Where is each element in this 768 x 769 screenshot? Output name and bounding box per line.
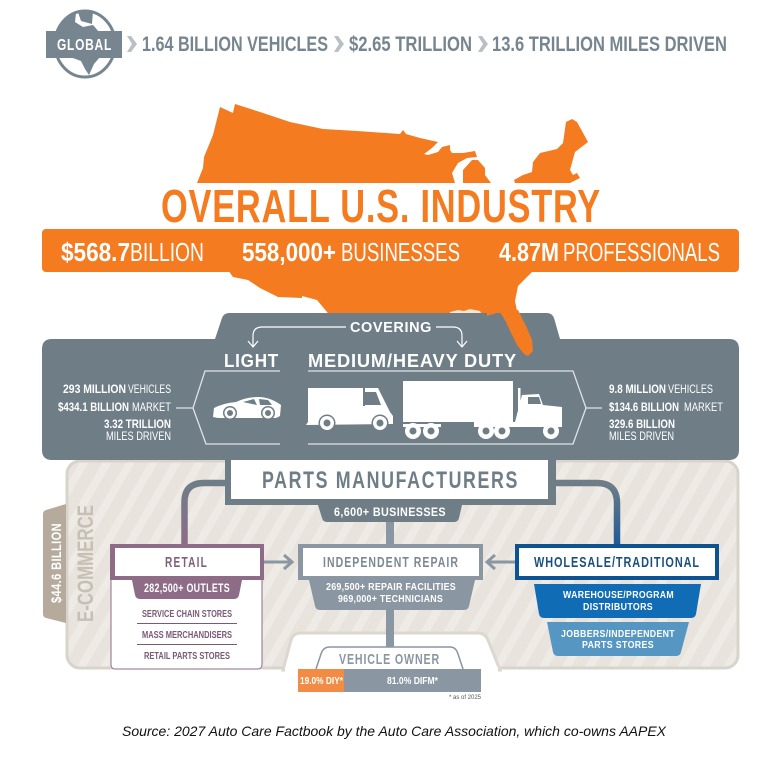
tab: e-commerce sales — [43, 504, 66, 623]
panel: retail: RETAIL — [165, 554, 208, 571]
heavy vehicle stats — [609, 382, 724, 443]
trillion stat: $2.65 TRILLION — [349, 33, 472, 56]
warehouse distributors tab — [534, 584, 701, 618]
light vehicle stats: MARKET — [132, 400, 172, 414]
revenue stat: $568.7 — [61, 237, 130, 267]
light vehicle stats: $434.1 BILLION — [58, 400, 129, 414]
light vehicle stats: MILES DRIVEN — [106, 429, 171, 443]
arrow: covering to light — [248, 327, 346, 347]
source line: Source: 2027 Auto Care Factbook by the Auto Care Association, which co-owns AAPEX — [122, 723, 667, 739]
businesses stat — [242, 237, 460, 267]
map: Florida — [487, 310, 533, 356]
connector: manufacturers to retail — [184, 483, 226, 546]
outlets tab — [132, 580, 242, 599]
warehouse distributors tab: DISTRIBUTORS — [583, 601, 653, 613]
icon: van — [306, 388, 393, 432]
panel: wholesale traditional — [515, 544, 719, 656]
frame: medium heavy vehicles — [308, 371, 602, 444]
businesses count tab: 6,600+ BUSINESSES — [334, 505, 446, 519]
retail channel list: RETAIL PARTS STORES — [144, 650, 230, 662]
heavy vehicle stats: $134.6 BILLION — [609, 400, 679, 414]
icon: globe: GLOBAL — [57, 37, 112, 54]
panel: independent repair: INDEPENDENT REPAIR — [323, 554, 459, 571]
panel: vehicle coverage — [42, 309, 739, 460]
professionals stat — [499, 237, 720, 267]
heavy vehicle stats: MARKET — [684, 400, 724, 414]
panel: retail — [110, 544, 264, 669]
connector: manufacturers to independent repair to vehicle owner — [386, 520, 394, 648]
map: northern United States — [197, 104, 588, 183]
icon: chevron — [478, 36, 488, 52]
light vehicle stats: VEHICLES — [128, 382, 171, 396]
icon: chevron — [334, 36, 344, 52]
retail channel list: SERVICE CHAIN STORES — [142, 608, 232, 620]
medium heavy heading: MEDIUM/HEAVY DUTY — [308, 351, 517, 371]
arrow: retail to independent repair — [264, 555, 292, 569]
parts manufacturers box: PARTS MANUFACTURERS — [262, 467, 519, 494]
vehicles stat: 1.64 BILLION VEHICLES — [142, 33, 328, 56]
repair facilities tab: 269,500+ REPAIR FACILITIES — [326, 581, 456, 593]
e-commerce label: E-COMMERCE — [73, 505, 98, 622]
map: Gulf Coast specks — [450, 309, 481, 313]
outlets tab: 282,500+ OUTLETS — [144, 581, 230, 595]
frame: light vehicles — [176, 371, 280, 444]
light vehicle stats: 3.32 TRILLION — [104, 417, 171, 431]
arrow: wholesale to independent repair — [487, 555, 515, 569]
bar: do it for me share: 81.0% DIFM* — [387, 676, 438, 687]
banner: U.S. industry totals — [42, 229, 739, 272]
heavy vehicle stats: VEHICLES — [668, 382, 713, 396]
panel: wholesale traditional: WHOLESALE/TRADITIONAL — [534, 554, 700, 571]
map: southern United States — [228, 270, 535, 316]
panel: independent repair — [298, 544, 483, 610]
icon: globe — [46, 11, 122, 77]
icon: car — [213, 397, 281, 420]
heavy vehicle stats: 329.6 BILLION — [609, 417, 675, 431]
jobbers tab: PARTS STORES — [582, 639, 654, 651]
retail channel list: MASS MERCHANDISERS — [142, 629, 232, 641]
light heading: LIGHT — [224, 351, 279, 371]
tab: e-commerce sales: $44.6 BILLION — [49, 523, 64, 603]
retail channel list — [137, 608, 237, 662]
warehouse distributors tab: WAREHOUSE/PROGRAM — [563, 589, 674, 601]
bar: do it yourself share — [298, 669, 344, 692]
icon: chevron — [127, 36, 137, 52]
businesses stat: 558,000+ — [242, 237, 336, 267]
panel: vehicle owner — [298, 647, 481, 701]
repair facilities tab — [309, 580, 475, 610]
panel: e-commerce striped background — [67, 461, 738, 673]
jobbers tab — [547, 622, 689, 656]
professionals stat: 4.87M — [499, 237, 559, 267]
footnote: * as of 2025 — [449, 694, 481, 701]
jobbers tab: JOBBERS/INDEPENDENT — [561, 628, 675, 640]
businesses stat: BUSINESSES — [341, 237, 460, 267]
global statistics row — [46, 11, 727, 77]
arrow: covering to medium/heavy — [436, 327, 467, 347]
icon: semi truck — [403, 381, 562, 439]
light vehicle stats: 293 MILLION — [63, 382, 126, 396]
title: OVERALL U.S. INDUSTRY — [161, 180, 601, 232]
connector: manufacturers to wholesale — [555, 483, 617, 546]
covering label: COVERING — [350, 320, 432, 336]
revenue stat: BILLION — [130, 237, 204, 267]
light vehicle stats — [58, 382, 172, 443]
heavy vehicle stats: 9.8 MILLION — [609, 382, 666, 396]
parts manufacturers box — [225, 458, 556, 522]
revenue stat — [61, 237, 204, 267]
panel: vehicle owner: VEHICLE OWNER — [339, 651, 440, 668]
bar: do it for me share — [344, 669, 481, 692]
repair facilities tab: 969,000+ TECHNICIANS — [338, 593, 443, 605]
bar: do it yourself share: 19.0% DIY* — [300, 676, 343, 687]
heavy vehicle stats: MILES DRIVEN — [609, 429, 674, 443]
